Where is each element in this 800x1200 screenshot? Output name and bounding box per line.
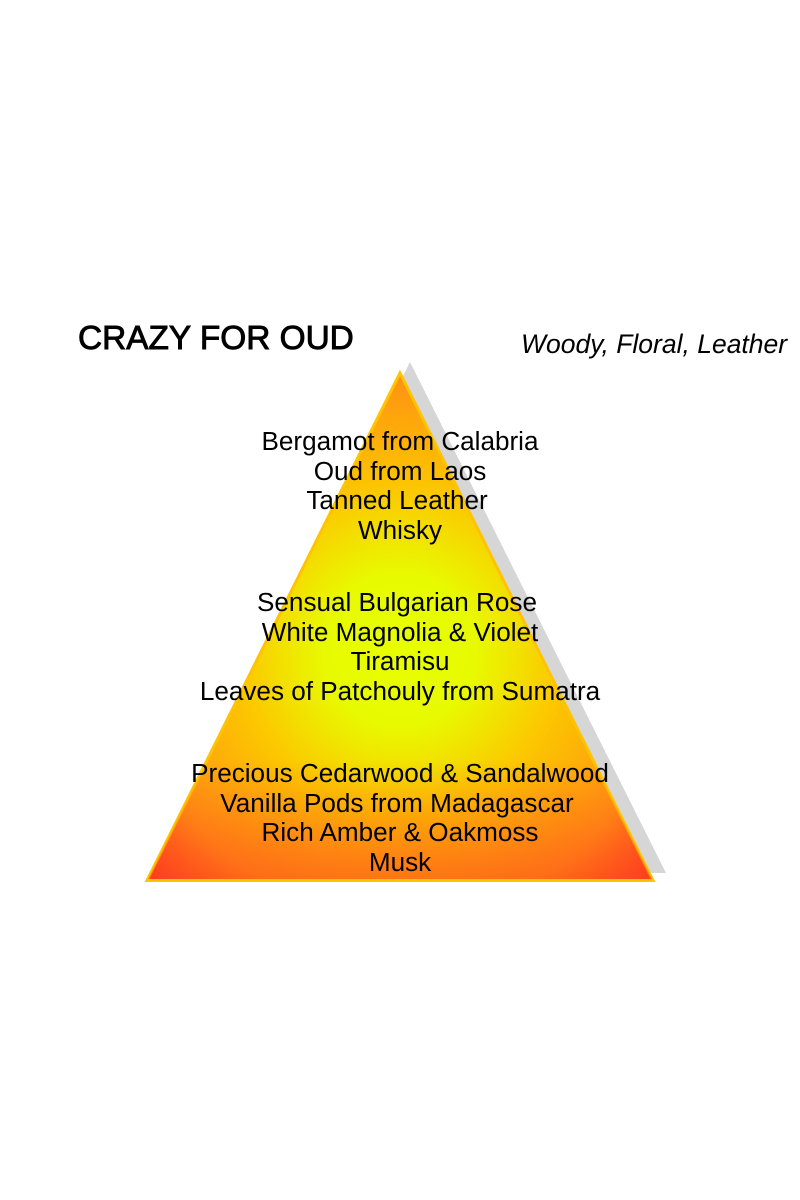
base notes: Precious Cedarwood & Sandalwood [191, 758, 609, 788]
fragrance family: Woody, Floral, Leather [521, 329, 787, 359]
title: CRAZY FOR OUD [78, 320, 354, 357]
heart notes: Tiramisu [350, 646, 450, 676]
heart notes: Sensual Bulgarian Rose [257, 587, 537, 617]
base notes [191, 758, 609, 877]
base notes: Rich Amber & Oakmoss [262, 817, 538, 847]
top notes: Tanned Leather [306, 485, 488, 515]
base notes: Musk [369, 847, 431, 877]
heart notes: White Magnolia & Violet [262, 617, 538, 647]
top notes: Bergamot from Calabria [262, 426, 538, 456]
top notes [262, 426, 538, 545]
base notes: Vanilla Pods from Madagascar [220, 788, 574, 818]
top notes: Oud from Laos [314, 456, 486, 486]
top notes: Whisky [358, 515, 442, 545]
heart notes [200, 587, 600, 706]
heart notes: Leaves of Patchouly from Sumatra [200, 676, 600, 706]
